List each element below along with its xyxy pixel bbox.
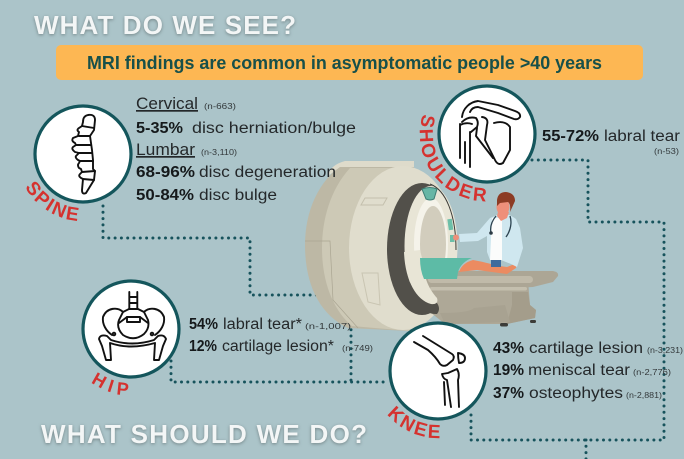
spine circle <box>35 106 131 202</box>
text: shoulder findings <box>542 128 680 156</box>
hip circle <box>83 281 179 377</box>
text: spine findings: (n-663) <box>204 102 236 111</box>
text: spine findings <box>136 94 356 204</box>
text: hip findings: 54% <box>189 316 218 333</box>
text: spine findings: disc herniation/bulge <box>192 120 356 137</box>
text: knee findings: 19% <box>493 362 524 379</box>
icon: spine <box>72 115 95 194</box>
label: hip: HIP <box>92 372 128 395</box>
icon: hip <box>99 292 166 360</box>
label: spine: SPINE <box>26 182 79 221</box>
text: shoulder findings: 55-72% <box>542 128 599 145</box>
dotted connector path <box>103 160 664 459</box>
text: shoulder findings: labral tear <box>604 128 680 145</box>
text: knee findings: (n-2,881) <box>626 391 662 400</box>
banner: key message <box>56 45 643 80</box>
shoulder circle <box>439 86 535 182</box>
text: knee findings: 37% <box>493 385 524 402</box>
text: spine findings: disc degeneration <box>199 164 336 181</box>
text: shoulder findings: (n-53) <box>654 147 679 156</box>
doctor <box>453 192 523 267</box>
icon: shoulder <box>460 101 520 167</box>
MRI scanner illustration <box>305 161 558 331</box>
text: spine findings: 5-35% <box>136 120 183 137</box>
text: knee findings: cartilage lesion <box>529 340 643 357</box>
patient <box>420 258 517 279</box>
text: spine findings: 50-84% <box>136 187 194 204</box>
patient table <box>404 250 558 326</box>
label: shoulder: SHOULDER <box>420 115 486 202</box>
text: knee findings: 43% <box>493 340 524 357</box>
text: spine findings: Lumbar <box>136 140 195 159</box>
text: knee findings: (n-2,776) <box>633 368 671 377</box>
text: knee findings: meniscal tear <box>528 362 630 379</box>
text: spine findings: disc bulge <box>199 187 277 204</box>
title: what should we do: WHAT SHOULD WE DO? <box>41 419 367 449</box>
text: knee findings: osteophytes <box>529 385 623 402</box>
text: hip findings: labral tear* <box>223 316 302 333</box>
banner: key message: MRI findings are common in asymptomatic people >40 years <box>87 53 602 73</box>
title: what do we see: WHAT DO WE SEE? <box>34 10 296 40</box>
text: knee findings: (n-3,231) <box>647 346 683 355</box>
knee circle <box>390 323 486 419</box>
text: hip findings: (n-1,007) <box>305 322 351 331</box>
panel: hip <box>81 279 181 395</box>
panel: spine <box>26 104 133 221</box>
text: spine findings: 68-96% <box>136 164 195 181</box>
panel: knee <box>388 321 488 438</box>
icon: knee <box>414 336 465 407</box>
scanner body <box>305 161 458 331</box>
label: knee: KNEE <box>388 406 440 438</box>
text: spine findings: Cervical <box>136 94 198 113</box>
text: hip findings: cartilage lesion* <box>222 338 334 355</box>
text: hip findings: 12% <box>189 338 217 355</box>
text: hip findings <box>189 316 373 355</box>
text: knee findings <box>493 340 683 402</box>
text: hip findings: (n-749) <box>342 344 373 353</box>
panel: shoulder <box>420 84 537 202</box>
text: spine findings: (n-3,110) <box>201 148 237 157</box>
